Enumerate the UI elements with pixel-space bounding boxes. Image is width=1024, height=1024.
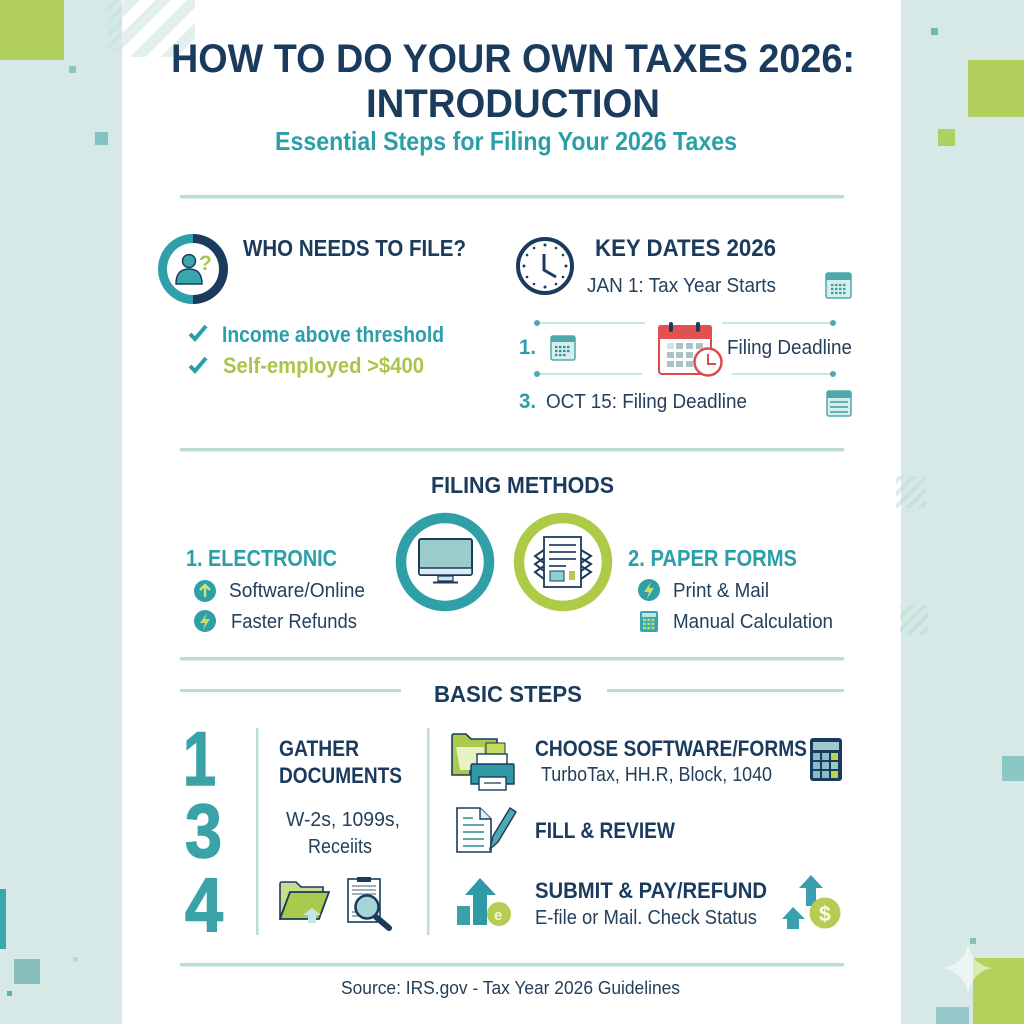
step numbers bbox=[183, 717, 223, 948]
icon: chart arrow and coin bbox=[457, 878, 511, 926]
icon: paper forms in green ring bbox=[519, 518, 607, 606]
item: faster refunds: Faster Refunds bbox=[231, 611, 357, 633]
heading: gather documents: DOCUMENTS bbox=[279, 763, 402, 788]
heading: fill and review: FILL & REVIEW bbox=[535, 818, 675, 843]
step number 1: 1. bbox=[519, 336, 536, 359]
icon: arrows and dollar coin bbox=[782, 875, 840, 929]
item: print and mail: Print & Mail bbox=[673, 580, 769, 602]
heading: who needs to file: WHO NEEDS TO FILE? bbox=[243, 235, 466, 261]
icon: document and pen bbox=[457, 808, 516, 852]
icon: folder bbox=[280, 882, 329, 923]
icon: calendar small middle bbox=[551, 336, 575, 360]
step numbers: 4 bbox=[185, 863, 223, 948]
heading: electronic: 1. ELECTRONIC bbox=[186, 545, 337, 571]
date: oct 15: 3. bbox=[519, 390, 536, 413]
heading: gather documents bbox=[279, 736, 402, 788]
footer source: Source: IRS.gov - Tax Year 2026 Guidelines bbox=[341, 978, 680, 998]
item: manual calculation: Manual Calculation bbox=[673, 611, 833, 633]
text: submit detail: E-file or Mail. Check Status bbox=[535, 907, 757, 929]
heading: key dates: KEY DATES 2026 bbox=[595, 235, 776, 262]
icon: calendar small top bbox=[826, 273, 851, 298]
panel: basic steps bbox=[183, 681, 842, 948]
date: oct 15: OCT 15: Filing Deadline bbox=[546, 391, 747, 413]
icon: person with question mark bbox=[158, 234, 228, 304]
date: jan 1: JAN 1: Tax Year Starts bbox=[587, 275, 776, 297]
item: faster refunds bbox=[194, 610, 357, 633]
icon: clock bbox=[518, 239, 572, 293]
dividers bbox=[180, 195, 844, 966]
text: documents list bbox=[286, 809, 400, 858]
item: self-employed: Self-employed >$400 bbox=[223, 353, 424, 378]
heading: basic steps: BASIC STEPS bbox=[434, 681, 582, 707]
icon: clipboard with magnifier bbox=[348, 877, 389, 928]
item: software/online: Software/Online bbox=[229, 580, 365, 602]
step numbers: 1 bbox=[183, 717, 216, 802]
text: documents list: W-2s, 1099s, bbox=[286, 809, 400, 831]
panel: key dates bbox=[518, 235, 852, 416]
icon: chart arrow and coin: e bbox=[494, 907, 502, 924]
date: filing deadline: Filing Deadline bbox=[727, 337, 852, 359]
heading: choose software: CHOOSE SOFTWARE/FORMS bbox=[535, 736, 807, 761]
title: INTRODUCTION bbox=[366, 82, 660, 126]
icon: computer in teal ring bbox=[401, 518, 489, 606]
text: software list: TurboTax, HH.R, Block, 1040 bbox=[541, 764, 772, 786]
panel: who needs to file bbox=[158, 234, 466, 378]
heading: paper forms: 2. PAPER FORMS bbox=[628, 545, 797, 571]
heading: gather documents: GATHER bbox=[279, 736, 359, 761]
icon: red calendar with clock bbox=[658, 322, 722, 376]
icon: calculator bbox=[810, 738, 842, 781]
heading: filing methods: FILING METHODS bbox=[431, 472, 614, 498]
icon: person with question mark: ? bbox=[199, 252, 212, 275]
step numbers: 3 bbox=[185, 789, 222, 874]
subtitle: Essential Steps for Filing Your 2026 Taxes bbox=[275, 126, 737, 156]
icon: calendar small bottom bbox=[827, 391, 851, 416]
text: documents list: Receiits bbox=[308, 836, 372, 858]
timeline lines bbox=[534, 320, 836, 377]
title bbox=[171, 37, 855, 126]
title: HOW TO DO YOUR OWN TAXES 2026: bbox=[171, 37, 855, 81]
icon: folder and printer bbox=[452, 734, 514, 790]
panel: filing methods bbox=[186, 472, 833, 633]
icon: arrows and dollar coin: $ bbox=[819, 903, 831, 926]
item: income above threshold: Income above threshold bbox=[222, 322, 444, 347]
item: print and mail bbox=[638, 579, 769, 602]
heading: submit: SUBMIT & PAY/REFUND bbox=[535, 878, 767, 903]
